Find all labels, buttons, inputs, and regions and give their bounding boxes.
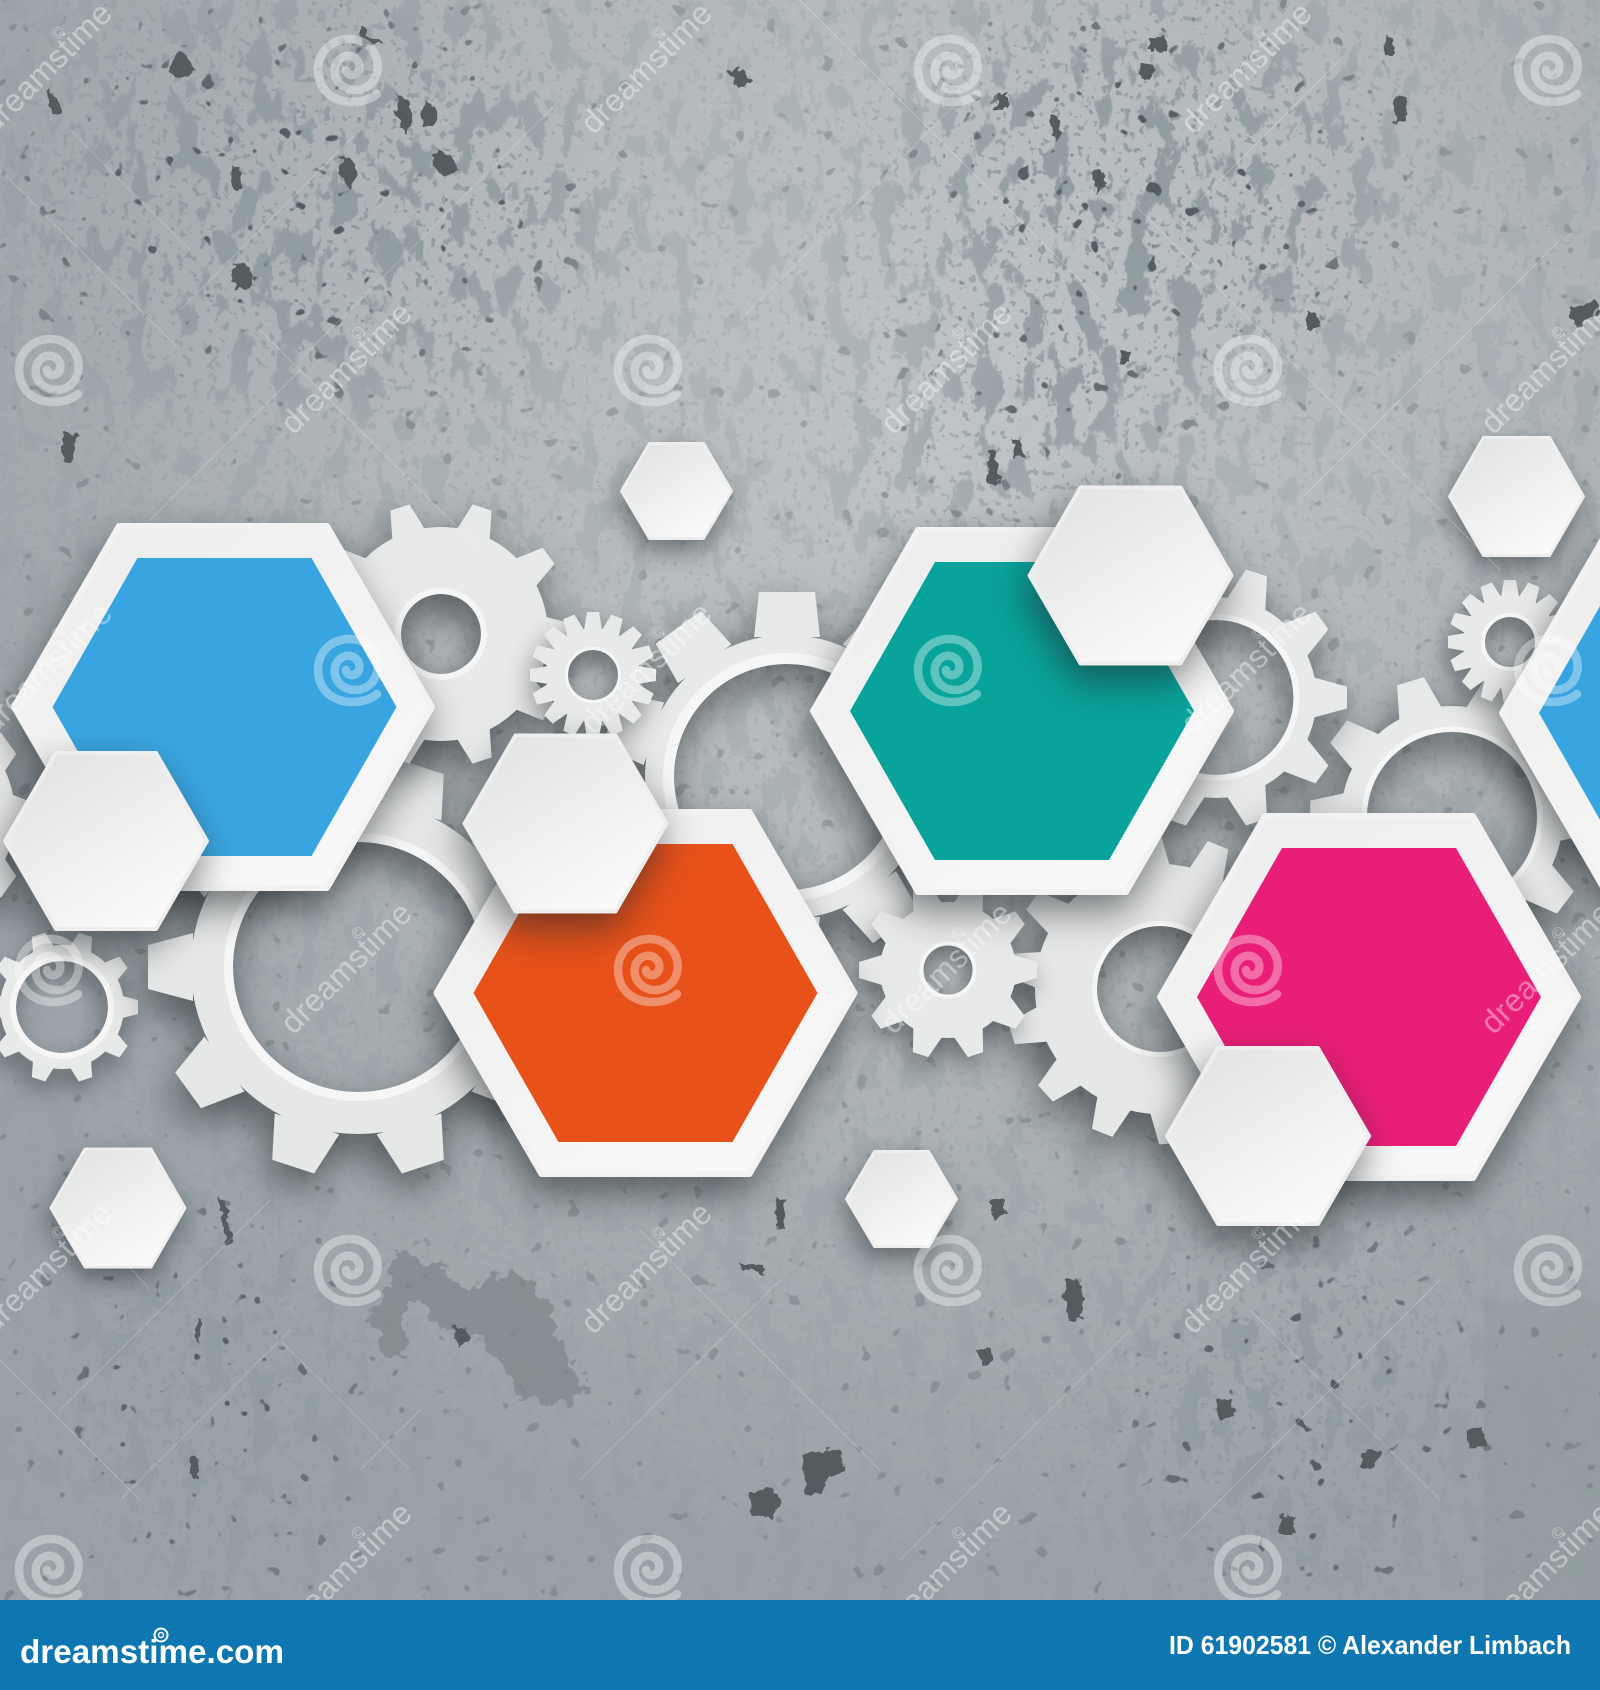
white hexagon: over orange (464, 736, 666, 912)
white hexagon: over blue (5, 753, 207, 929)
footer bar (0, 1600, 1600, 1690)
gear: small top right (1448, 580, 1572, 704)
footer credit: ID 61902581 © Alexander Limbach (1169, 1630, 1571, 1660)
gear: medium behind magenta hexagon (1004, 833, 1316, 1145)
white hexagon: small top centre (622, 444, 732, 538)
hexagon frame: blue (14, 526, 432, 888)
white hexagon: over teal (1030, 488, 1232, 664)
white hexagon: over magenta (1167, 1048, 1369, 1224)
hexagon frame: teal (813, 530, 1231, 892)
gear: left edge partial (0, 693, 32, 903)
gear: large ring lower left (148, 757, 568, 1177)
hexagon frame: orange (436, 812, 854, 1174)
white hexagon: small bottom centre (846, 1152, 956, 1246)
hexagon frame: blue at right edge (1502, 532, 1600, 894)
gear: small bottom centre (859, 881, 1037, 1059)
white hexagon: top right (1450, 438, 1584, 556)
gear: medium upper left (308, 502, 574, 766)
gear: small centre left (530, 612, 656, 738)
hexagon frame: magenta (1160, 816, 1578, 1178)
gear: ring behind teal hexagon (1085, 567, 1347, 828)
gear: small ring lower left (0, 931, 138, 1083)
gear: ring far right (1310, 675, 1594, 959)
footer logo: dreamstime.com (20, 1633, 284, 1670)
gear: large ring centre top (601, 592, 973, 962)
white hexagon: bottom left (51, 1149, 185, 1267)
